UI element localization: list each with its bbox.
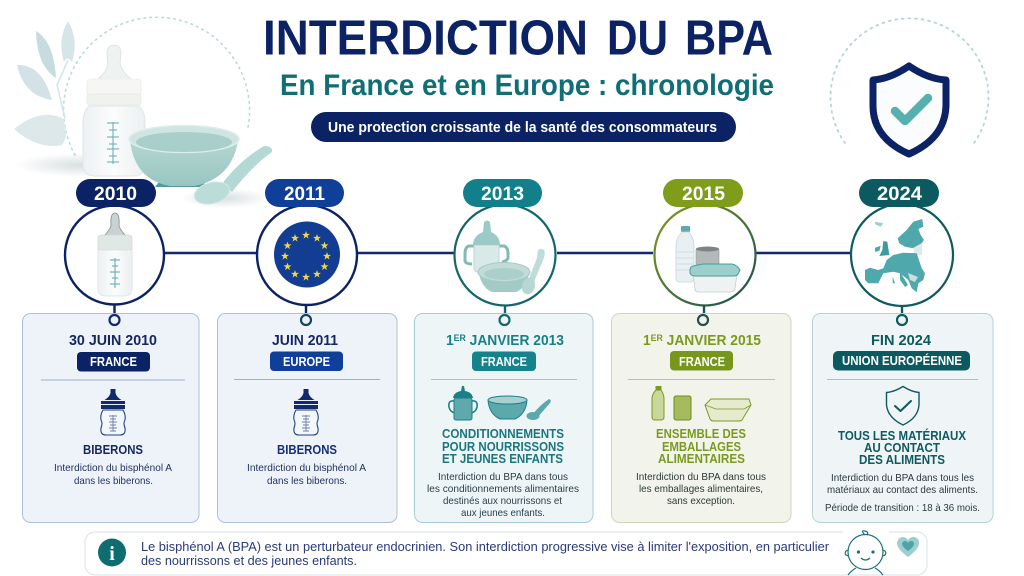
icon: heart — [897, 537, 919, 557]
date: JANVIER 2013 — [466, 332, 564, 349]
heading: ALIMENTAIRES — [658, 452, 745, 466]
title: INTERDICTION — [263, 12, 588, 66]
description — [247, 462, 366, 487]
spoon — [192, 146, 272, 208]
heading — [838, 428, 967, 467]
icon: bottle — [101, 389, 125, 435]
subtitle: En France et en Europe : chronologie — [280, 69, 774, 102]
heading: AU CONTACT — [864, 441, 940, 455]
description: matériaux au contact des aliments. — [827, 484, 978, 496]
icon: small bottle — [98, 213, 132, 296]
description — [54, 462, 172, 487]
badge: France — [472, 352, 536, 371]
icon: sippy cup, bowl, spoon — [465, 220, 545, 296]
title: DU — [607, 12, 668, 66]
timeline node 2013 — [454, 179, 556, 316]
icon: EU flag — [274, 222, 340, 288]
year pill 2011: 2011 — [284, 184, 325, 205]
table shadow — [15, 153, 145, 177]
date: JUIN 2011 — [272, 332, 338, 349]
bowl — [129, 126, 239, 187]
heading: TOUS LES MATÉRIAUX — [838, 428, 967, 443]
badge: Union européenne — [833, 351, 970, 370]
badge: France: FRANCE — [90, 354, 137, 369]
connector ring — [500, 315, 510, 325]
timeline node 2015 — [654, 179, 756, 316]
date: FIN 2024 — [871, 332, 932, 349]
description: dans les biberons. — [74, 475, 153, 487]
description: Interdiction du BPA dans tous — [438, 471, 568, 483]
icon: bottle, can, tray — [652, 386, 751, 421]
badge: Europe: EUROPE — [283, 354, 330, 369]
connector ring — [698, 315, 708, 325]
icon: baby face — [843, 529, 889, 575]
timeline node 2024 — [851, 179, 953, 316]
badge: Union européenne: UNION EUROPÉENNE — [842, 353, 962, 368]
illustration: bottle, bowl and spoon — [14, 17, 272, 208]
tagline pill — [311, 112, 736, 142]
icon: map of Europe — [865, 219, 925, 292]
date: ER — [454, 333, 466, 344]
description — [636, 471, 766, 507]
description: Interdiction du bisphénol A — [247, 462, 366, 474]
dotted arc left — [64, 17, 250, 155]
banner text — [141, 539, 830, 568]
heading: DES ALIMENTS — [859, 453, 945, 467]
leaves — [14, 21, 75, 146]
connector ring — [301, 315, 311, 325]
connector ring — [110, 315, 120, 325]
card: fin 2024 — [812, 314, 993, 522]
icon: info: i — [109, 543, 115, 565]
badge: Europe — [270, 352, 343, 371]
card: 1er janvier 2013 — [414, 314, 593, 522]
title — [263, 12, 773, 66]
icon: shield with check — [831, 18, 989, 154]
heading: CONDITIONNEMENTS — [442, 427, 564, 441]
timeline node 2010 — [65, 179, 164, 316]
description: les emballages alimentaires, — [639, 483, 763, 495]
date: 30 JUIN 2010 — [69, 332, 157, 349]
badge: France: FRANCE — [679, 354, 725, 369]
year pill 2013: 2013 — [481, 184, 524, 205]
card: 1er janvier 2015 — [612, 314, 791, 522]
date: JANVIER 2015 — [663, 332, 761, 349]
heading — [656, 427, 746, 466]
date: ER — [651, 333, 663, 344]
badge: France — [670, 351, 733, 370]
description: les conditionnements alimentaires — [427, 483, 579, 495]
description: sans exception. — [667, 495, 735, 507]
heading: BIBERONS — [277, 443, 337, 457]
heading — [442, 427, 564, 466]
description — [825, 472, 980, 514]
icon: cup, bowl, spoon — [449, 386, 551, 420]
dotted arc right — [831, 18, 989, 143]
connector ring — [897, 315, 907, 325]
info banner — [85, 529, 927, 575]
large baby bottle — [83, 45, 145, 176]
icon: bottle, can, food box — [676, 226, 740, 292]
description: Interdiction du BPA dans tous les — [831, 472, 974, 484]
card: 30 juin 2010 — [22, 314, 199, 522]
description: dans les biberons. — [267, 475, 347, 487]
heading: ET JEUNES ENFANTS — [442, 452, 563, 466]
year pill 2010: 2010 — [94, 184, 137, 205]
timeline line — [165, 252, 850, 254]
badge: France — [77, 352, 150, 372]
icon: info — [98, 538, 126, 566]
icon: shield — [886, 386, 919, 425]
icon: bottle — [294, 389, 318, 435]
date: 1 — [446, 332, 454, 349]
heading: EMBALLAGES — [662, 440, 741, 454]
description: Interdiction du BPA dans tous — [636, 471, 766, 483]
tagline pill: Une protection croissante de la santé des consommateurs — [328, 120, 717, 136]
heading: BIBERONS — [83, 443, 143, 457]
year pill 2015: 2015 — [682, 184, 725, 205]
heading: POUR NOURRISSONS — [442, 440, 564, 454]
description: destinés aux nourrissons et — [443, 495, 562, 507]
date: 1 — [643, 332, 651, 349]
description: Période de transition : 18 à 36 mois. — [825, 502, 980, 514]
year pill 2024: 2024 — [877, 184, 922, 205]
banner text: Le bisphénol A (BPA) est un perturbateur endocrinien. Son interdiction progressive vise à limiter l'exposition, en particulier — [141, 539, 830, 554]
banner text: des nourrissons et des jeunes enfants. — [141, 553, 357, 568]
timeline node 2011 — [257, 179, 357, 316]
description: Interdiction du bisphénol A — [54, 462, 172, 474]
description — [427, 471, 579, 519]
description: aux jeunes enfants. — [461, 507, 545, 519]
heading: ENSEMBLE DES — [656, 427, 746, 441]
card: juin 2011 — [218, 314, 397, 522]
title: BPA — [685, 12, 773, 66]
badge: France: FRANCE — [481, 354, 527, 369]
